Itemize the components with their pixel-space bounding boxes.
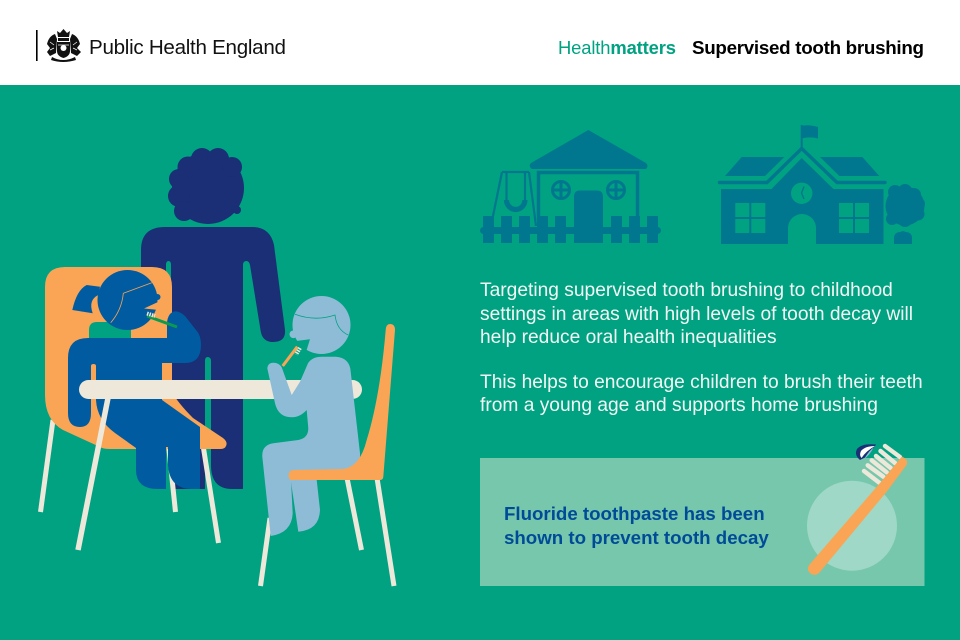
icon: circle behind toothbrush (807, 481, 897, 571)
panel: fluoride callout (480, 444, 924, 586)
callout text: Fluoride toothpaste has been (504, 503, 765, 524)
heading: page title: Supervised tooth brushing (692, 37, 924, 58)
girl figure (68, 270, 201, 489)
icon: school with flag and tree (720, 125, 925, 244)
illustration: children brushing at table with adult (40, 148, 395, 586)
header bar (0, 0, 960, 85)
text block: targeting: help reduce oral health inequalities (480, 327, 777, 348)
icon: royal crest (47, 29, 81, 62)
boy's chair legs (260, 478, 394, 586)
adult figure (141, 148, 285, 489)
table leg (78, 398, 108, 550)
text block: encourage: This helps to encourage children to brush their teeth (480, 372, 923, 393)
icon: house with swing and fence (480, 130, 661, 243)
girl's chair (45, 267, 227, 449)
text block: encourage: from a young age and supports home brushing (480, 395, 878, 416)
icon: toothbrush (808, 446, 907, 575)
icon: toothpaste swirl (856, 444, 876, 460)
callout text: shown to prevent tooth decay (504, 527, 769, 548)
table (79, 380, 362, 399)
text block: targeting: settings in areas with high levels of tooth decay will (480, 304, 913, 325)
text block: targeting: Targeting supervised tooth brushing to childhood (480, 280, 893, 301)
heading: Healthmatters: Healthmatters (558, 37, 676, 58)
girl's chair legs (40, 420, 218, 543)
boy's chair (289, 324, 395, 480)
logo wordmark: Public Health England (89, 36, 286, 59)
boy figure (262, 296, 360, 536)
